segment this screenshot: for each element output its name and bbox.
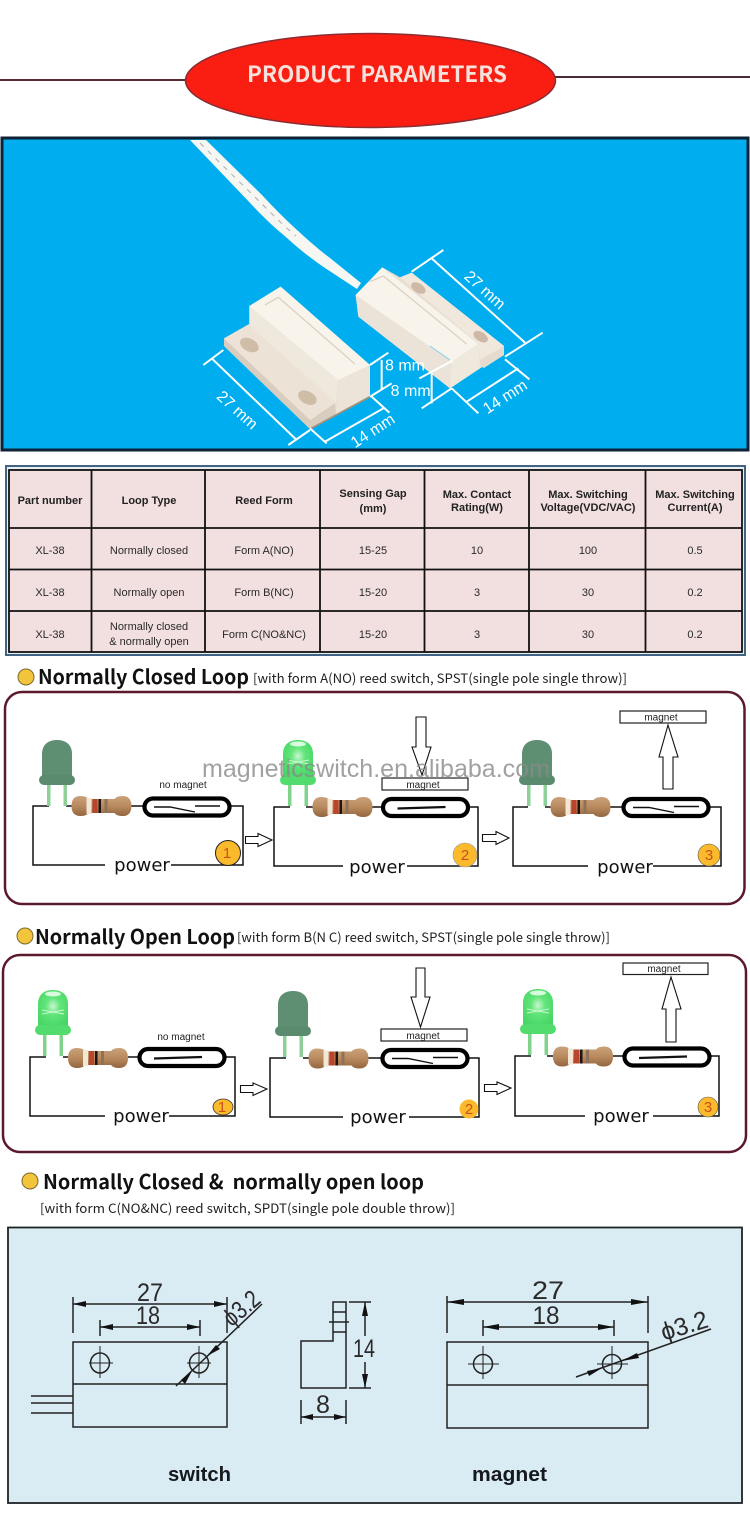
drawing: switch front view: 18 <box>136 1302 160 1330</box>
circuit 2: magnet <box>406 1031 440 1042</box>
drawing: switch side view: 14 <box>353 1335 375 1363</box>
heading: normally closed loop: Normally Closed Loop <box>38 661 249 690</box>
title oval: PRODUCT PARAMETERS <box>247 57 507 89</box>
switch block <box>356 267 504 388</box>
circuit 3: power <box>593 1106 649 1127</box>
table header: Current(A) <box>668 502 723 514</box>
panel: dimension drawings <box>8 1228 742 1503</box>
circuit 1 <box>33 740 243 876</box>
circuit 3: 3 <box>704 1099 712 1116</box>
circuit 3: magnet <box>644 712 678 724</box>
table row 2: 15-20 <box>359 587 387 599</box>
label: magnet: magnet <box>472 1464 547 1486</box>
dimension lines and labels: 8 mm <box>385 357 425 374</box>
table row 3: Form C(NO&NC) <box>222 629 306 641</box>
drawing: switch side view <box>301 1302 375 1424</box>
circuit 2 <box>270 968 479 1128</box>
dimension lines and labels <box>203 250 543 452</box>
dimension lines and labels: 27 mm <box>213 388 261 433</box>
circuit 3: magnet <box>647 964 681 975</box>
table row 2 <box>35 587 703 599</box>
circuit 1: no magnet <box>159 780 207 791</box>
panel: normally open loop <box>3 955 746 1152</box>
drawing: magnet front view: ϕ3.2 <box>657 1306 711 1346</box>
icon: sensor blocks <box>203 250 543 452</box>
table row 2: Form B(NC) <box>234 587 294 599</box>
table row 2: 0.2 <box>687 587 703 599</box>
heading: normally open loop: Normally Open Loop <box>35 921 235 950</box>
heading: normally closed and open loop: Normally Closed & normally open loop <box>43 1166 424 1195</box>
dimension lines and labels: 14 mm <box>348 411 398 452</box>
heading: normally open loop: [with form B(N C) reed switch, SPST(single pole single throw)] <box>237 927 610 946</box>
table row 1: XL-38 <box>35 545 65 557</box>
table: part parameters <box>6 466 745 655</box>
dimension lines and labels: 14 mm <box>480 377 531 418</box>
circuit 1: 1 <box>223 845 231 862</box>
heading: normally closed and open loop: [with form C(NO&NC) reed switch, SPDT(single pole double throw)] <box>40 1198 455 1217</box>
table header: Max. Contact <box>443 489 512 501</box>
arrow: step 1 to 2 <box>246 834 272 846</box>
table row 1: Form A(NO) <box>234 545 294 557</box>
dimension lines and labels: 27 mm <box>461 268 508 313</box>
table row 2: XL-38 <box>35 587 65 599</box>
heading: normally closed loop <box>18 661 627 690</box>
icon: white twin cable <box>190 140 361 289</box>
circuit 1: power <box>114 855 170 876</box>
drawing: magnet front view <box>447 1277 711 1428</box>
circuit 1: 1 <box>218 1099 226 1116</box>
magnet block <box>224 287 370 429</box>
circuit 2 <box>274 717 478 878</box>
heading: normally open loop <box>17 921 610 950</box>
circuit 1 <box>30 990 235 1127</box>
table header: Loop Type <box>122 495 176 507</box>
table header: Reed Form <box>235 495 293 507</box>
drawing: switch front view: ϕ3.2 <box>217 1285 266 1332</box>
table row 1: 0.5 <box>687 545 703 557</box>
circuit 1: power <box>113 1106 169 1127</box>
table header: Sensing Gap <box>339 488 407 500</box>
circuit 3: power <box>597 857 653 878</box>
table row 1: Normally closed <box>110 545 188 557</box>
drawing: switch front view <box>31 1279 266 1427</box>
header line <box>0 77 750 80</box>
table row 3: XL-38 <box>35 629 65 641</box>
table row 3: & normally open <box>109 636 189 648</box>
table row 1 <box>35 545 703 557</box>
table row 3: 3 <box>474 629 480 641</box>
table row 3 <box>35 621 703 648</box>
table header: Rating(W) <box>451 502 503 514</box>
dimension lines and labels: 8 mm <box>391 383 431 400</box>
arrow: step 2 to 3 <box>484 1082 511 1094</box>
label: switch: switch <box>168 1464 231 1486</box>
table row 1: 10 <box>471 545 483 557</box>
heading: normally closed and open loop <box>22 1166 455 1217</box>
circuit 2: magnet <box>406 780 440 791</box>
circuit 2: power <box>349 857 405 878</box>
arrow: step 1 to 2 <box>240 1083 267 1096</box>
table row 1: 100 <box>579 545 597 557</box>
table header <box>18 488 735 515</box>
watermark: magneticswitch.en.alibaba.com <box>202 755 550 783</box>
table row 3: 0.2 <box>687 629 703 641</box>
table header: (mm) <box>360 503 387 515</box>
table row 3: 30 <box>582 629 594 641</box>
heading: normally closed loop: [with form A(NO) reed switch, SPST(single pole single throw)] <box>253 668 627 687</box>
table row 3: 15-20 <box>359 629 387 641</box>
drawing: switch side view: 8 <box>316 1391 330 1419</box>
circuit 2: 2 <box>461 847 469 864</box>
table header: Voltage(VDC/VAC) <box>541 502 636 514</box>
table header: Max. Switching <box>655 489 735 501</box>
panel: normally closed loop <box>5 692 744 904</box>
table header: Part number <box>18 495 83 507</box>
circuit 3 <box>513 711 721 878</box>
circuit 2: power <box>350 1107 406 1128</box>
circuit 3 <box>515 963 719 1127</box>
circuit 3: 3 <box>705 847 713 864</box>
drawing: magnet front view: 27 <box>532 1277 564 1305</box>
table row 3: Normally closed <box>110 621 188 633</box>
table header: Max. Switching <box>548 489 628 501</box>
arrow: step 2 to 3 <box>482 832 509 844</box>
drawing: magnet front view: 18 <box>532 1302 560 1330</box>
table row 1: 15-25 <box>359 545 387 557</box>
circuit 1: no magnet <box>157 1032 205 1043</box>
drawing: switch front view: 27 <box>137 1279 163 1307</box>
table row 2: 30 <box>582 587 594 599</box>
panel: product photo <box>2 138 748 452</box>
table row 2: Normally open <box>114 587 184 599</box>
table row 2: 3 <box>474 587 480 599</box>
title oval <box>186 34 556 128</box>
circuit 2: 2 <box>465 1101 473 1118</box>
